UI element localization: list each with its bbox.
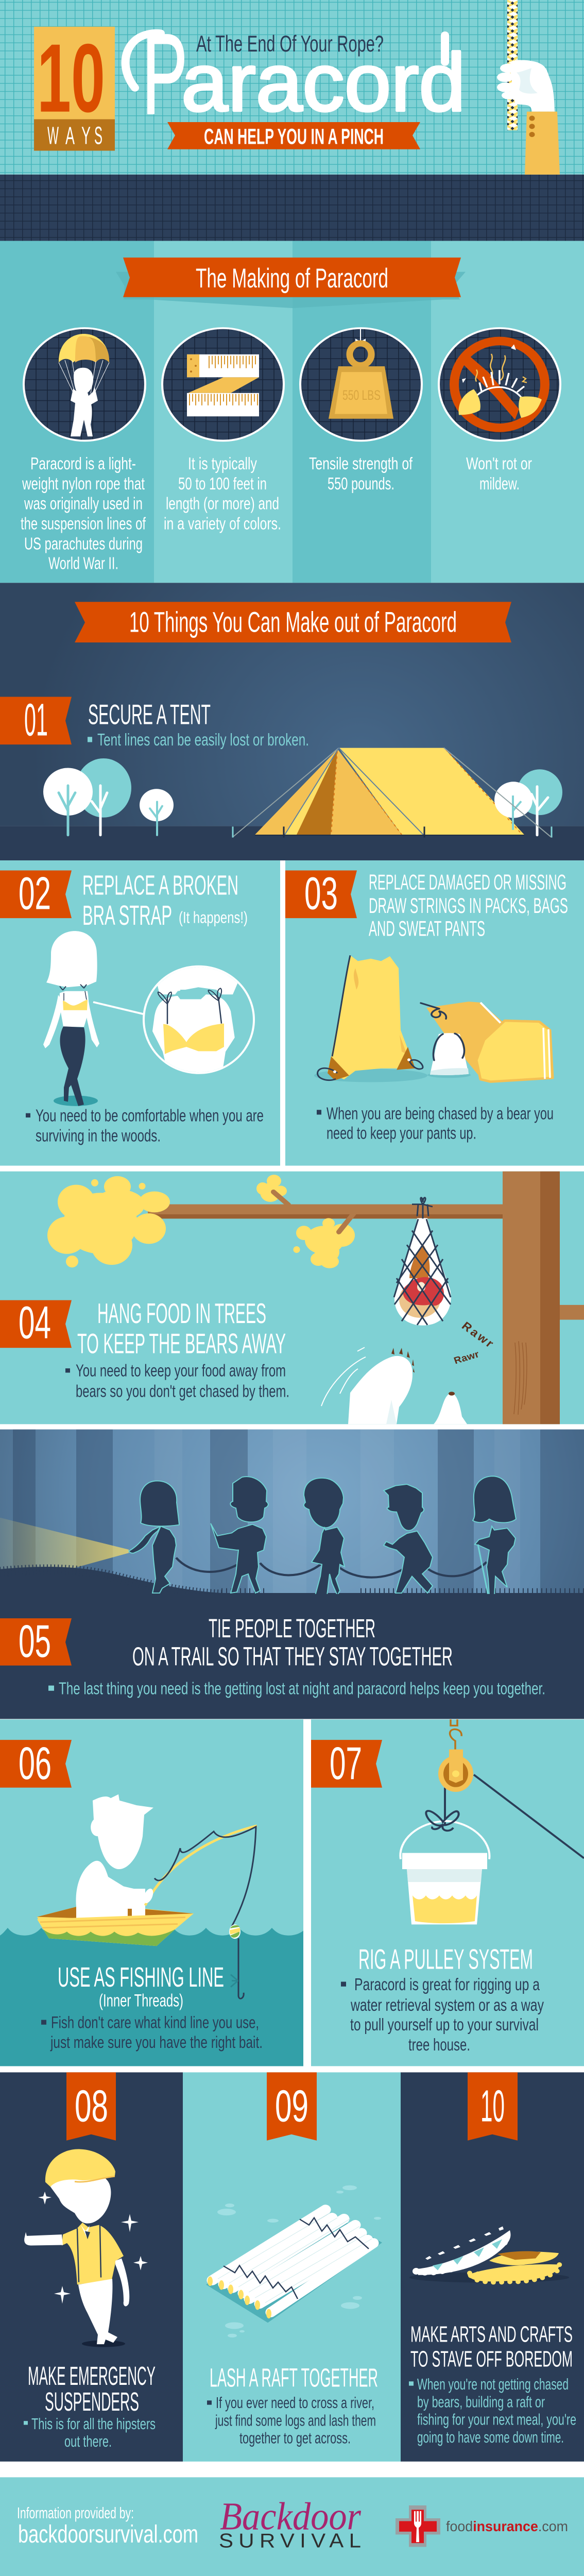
icon: hanging rope: [507, 0, 518, 130]
text: length description: 50 to 100 feet in: [178, 474, 267, 494]
panel: 01 secure a tent: [0, 583, 584, 860]
icon: parachute circle: [24, 328, 145, 440]
text: length description: [164, 454, 281, 533]
icon: sleeve cuff: [525, 112, 560, 175]
heading: tie people together: [132, 1614, 453, 1671]
text: hipsters: out there.: [64, 2432, 112, 2450]
number ribbon 09: [267, 2072, 317, 2141]
icon: twigs: [273, 1192, 354, 1232]
number ribbon 06: 06: [19, 1737, 51, 1789]
number ribbon 08: [66, 2072, 116, 2141]
text: information provided by: [17, 2504, 198, 2548]
text: information provided by: backdoorsurvival.com: [18, 2520, 198, 2548]
ground strip: [0, 1594, 584, 1719]
icon: fisherman in boat: [37, 1794, 257, 1998]
person 5 with stick: [473, 1476, 516, 1596]
icon: flashlight beam: [0, 1518, 129, 1588]
badge: 10 ways: Y: [81, 122, 91, 149]
icon: yellow pack: [476, 1021, 553, 1082]
logo: backdoor survival: SURVIVAL: [219, 2529, 361, 2552]
icon: bracelets: [409, 2226, 569, 2283]
icon: water puddles: [217, 2185, 381, 2337]
text: paracord description: was originally used in: [24, 495, 143, 513]
heading: hang food in trees: [77, 1298, 286, 1360]
text: right bait: just make sure you have the right bait.: [50, 2033, 263, 2052]
icon: sparkles: [38, 2192, 148, 2303]
icon: no rot or mildew circle: [439, 328, 560, 440]
number ribbon 10: [468, 2072, 518, 2141]
text: comfortable: surviving in the woods.: [36, 1127, 161, 1145]
text: paracord description: World War II.: [48, 554, 118, 573]
panel: footer: [0, 2477, 584, 2576]
text: paracord description: the suspension lines of: [21, 515, 146, 533]
number ribbon 10: 10: [480, 2081, 505, 2131]
icon: tree trunk and branch: [148, 1172, 584, 1424]
text: paracord description: weight nylon rope that: [22, 474, 145, 494]
icon: 550 lb weight circle: 550 LBS: [342, 387, 381, 403]
text: keep food away: bears so you don't get chased by them.: [76, 1382, 289, 1401]
number ribbon 01: [0, 694, 72, 745]
panel: 09 raft: LASH A RAFT TOGETHER: [210, 2363, 378, 2393]
heading: hang food in trees: HANG FOOD IN TREES: [97, 1298, 266, 1330]
text: tent lines: [88, 731, 309, 750]
logo: food insurance cross: [396, 2505, 440, 2547]
panel: 10 arts and crafts: [401, 2072, 584, 2462]
text: right bait: Fish don't care what kind line you use,: [51, 2013, 259, 2032]
text: tensile strength: [309, 454, 413, 494]
text: cross a river: just find some logs and lash them: [215, 2412, 376, 2429]
panel: 02 bra strap: [0, 860, 280, 1166]
text: hipsters: This is for all the hipsters: [31, 2415, 156, 2433]
text: paracord description: Paracord is a light-: [30, 454, 136, 473]
number ribbon 02: 02: [19, 868, 51, 919]
icon: hipster man: [24, 2149, 129, 2347]
panel: 03 draw strings: [285, 860, 584, 1166]
icon: food in a net: [394, 1198, 451, 1326]
panel: the making of paracord: [0, 241, 584, 583]
icon: water: [0, 1928, 303, 2066]
heading: replace a broken bra strap: (It happens!): [179, 908, 248, 926]
icon: left trees: [43, 758, 174, 835]
number ribbon 03: 03: [304, 868, 338, 919]
ribbon: the making of paracord: [116, 258, 466, 308]
panel: 04 hang food: [0, 1172, 584, 1424]
subtitle: at the end of your rope: At The End Of Your Rope?: [196, 31, 384, 57]
text: water retrieval: tree house.: [408, 2036, 470, 2055]
text: down time: [409, 2375, 576, 2446]
text: length description: in a variety of colors.: [164, 515, 281, 533]
number ribbon 09: 09: [275, 2081, 308, 2131]
ribbon: the making of paracord: The Making of Paracord: [196, 263, 388, 294]
heading: secure a tent: SECURE A TENT: [88, 699, 211, 731]
text: comfortable: You need to be comfortable when you are: [36, 1107, 264, 1125]
icon: magnified bra strap: [139, 964, 254, 1078]
heading: replace damaged draw strings: AND SWEAT PANTS: [369, 917, 485, 941]
panel: 08 suspenders: [0, 2072, 183, 2462]
heading: make emergency suspenders: SUSPENDERS: [45, 2387, 139, 2416]
person 3: [304, 1478, 345, 1596]
text: cross a river: If you ever need to cross a river,: [216, 2394, 374, 2412]
text: keep food away: [65, 1362, 289, 1401]
icon: paracord rope: [176, 1558, 487, 1578]
icon: tent: [233, 748, 552, 838]
text: right bait: [41, 2013, 263, 2052]
text: cross a river: [207, 2394, 376, 2447]
panel: 07 pulley system: [311, 1719, 584, 2066]
heading: use as fishing line: [58, 1961, 224, 2010]
text: water retrieval: [341, 1975, 544, 2055]
logo: backdoor survival: [219, 2495, 361, 2552]
header panel: [0, 0, 584, 241]
heading: use as fishing line: USE AS FISHING LINE: [58, 1961, 224, 1992]
panel: 08 suspenders: MAKE EMERGENCY: [28, 2362, 156, 2391]
text: pants up: [317, 1105, 554, 1143]
title: Paracord: P: [142, 10, 187, 138]
text: tent lines: Tent lines can be easily lost or broken.: [97, 731, 309, 750]
ribbon: 10 things you can make: [75, 602, 511, 642]
text: rawr growls: [453, 1319, 496, 1366]
icon: woman: [43, 931, 143, 1106]
heading: make emergency suspenders: [28, 2362, 156, 2416]
heading: make arts and crafts: [410, 2321, 573, 2371]
person 2 with map: [211, 1477, 268, 1593]
icon: raft: [206, 2210, 382, 2323]
title: Paracord: [126, 10, 466, 138]
panel: 06 fishing line: [0, 1719, 303, 2066]
text: won't rot: Won't rot or: [466, 454, 532, 473]
icon: bear paw and snout: [321, 1347, 467, 1424]
text: paracord description: [21, 454, 146, 573]
number ribbon 08: 08: [75, 2081, 108, 2131]
text: won't rot: [466, 454, 532, 494]
number ribbon 05: 05: [19, 1615, 51, 1667]
icon: right trees: [444, 748, 562, 837]
icon: sweat pants: [421, 1002, 503, 1075]
heading: replace a broken bra strap: REPLACE A BROKEN: [82, 870, 238, 901]
badge: 10 ways: S: [94, 122, 102, 149]
icon: rope lines: [445, 1775, 584, 1858]
panel: 09 raft: [183, 2072, 401, 2462]
person 1 with flashlight: [129, 1481, 179, 1593]
heading: replace a broken bra strap: BRA STRAP: [82, 900, 172, 931]
text: tensile strength: 550 pounds.: [328, 474, 394, 494]
text: foodinsurance.com: foodinsurance.com: [446, 2519, 568, 2535]
ribbon: can help you in a pinch: CAN HELP YOU IN A PINCH: [204, 125, 384, 149]
icon: measuring tape circle: [162, 328, 284, 440]
badge: 10 ways: [34, 24, 115, 151]
text: tensile strength: Tensile strength of: [309, 454, 413, 473]
icon: ground and grass: [0, 1567, 584, 1719]
icon: leaves: [47, 1175, 355, 1268]
text: cross a river: together to get across.: [239, 2429, 351, 2447]
badge: 10 ways: A: [65, 122, 75, 149]
heading: tie people together: TIE PEOPLE TOGETHER: [209, 1614, 375, 1643]
number ribbon 01: 01: [24, 694, 48, 745]
text: information provided by: Information provided by:: [17, 2504, 134, 2522]
text: keep food away: You need to keep your food away from: [76, 1362, 286, 1380]
icon: large drawstring bag: [314, 955, 427, 1082]
person 4: [384, 1484, 433, 1593]
text: hipsters: [24, 2415, 156, 2450]
number ribbon 04: 04: [19, 1297, 51, 1348]
heading: replace damaged draw strings: [369, 871, 568, 941]
text: length description: It is typically: [188, 454, 257, 473]
number ribbon 07: 07: [330, 1737, 362, 1789]
text: won't rot: mildew.: [479, 474, 520, 494]
text: paracord description: US parachutes during: [24, 535, 143, 553]
icon: bucket: [400, 1811, 489, 1924]
panel: 05 tie people together: [0, 1429, 584, 1719]
heading: replace a broken bra strap: [82, 870, 248, 931]
text: pants up: need to keep your pants up.: [327, 1124, 476, 1143]
heading: use as fishing line: (Inner Threads): [99, 1991, 183, 2010]
icon: white bag: [427, 1033, 471, 1078]
ribbon: can help you in a pinch: [167, 122, 420, 149]
icon: pulley: [438, 1719, 473, 1792]
heading: hang food in trees: TO KEEP THE BEARS AWAY: [77, 1328, 286, 1360]
text: comfortable: [26, 1107, 264, 1145]
icon: hand gripping rope: [497, 60, 555, 112]
icon: 550 lb weight circle: [300, 328, 422, 440]
text: rawr growls: Rawr: [453, 1349, 481, 1366]
text: length description: length (or more) and: [166, 495, 279, 513]
badge: 10 ways: 10: [37, 24, 105, 132]
title: Paracord: aracord: [181, 37, 466, 128]
text: rawr growls: Rawr: [459, 1319, 496, 1350]
logo: backdoor survival: Backdoor: [220, 2495, 361, 2538]
badge: 10 ways: W: [47, 122, 59, 149]
